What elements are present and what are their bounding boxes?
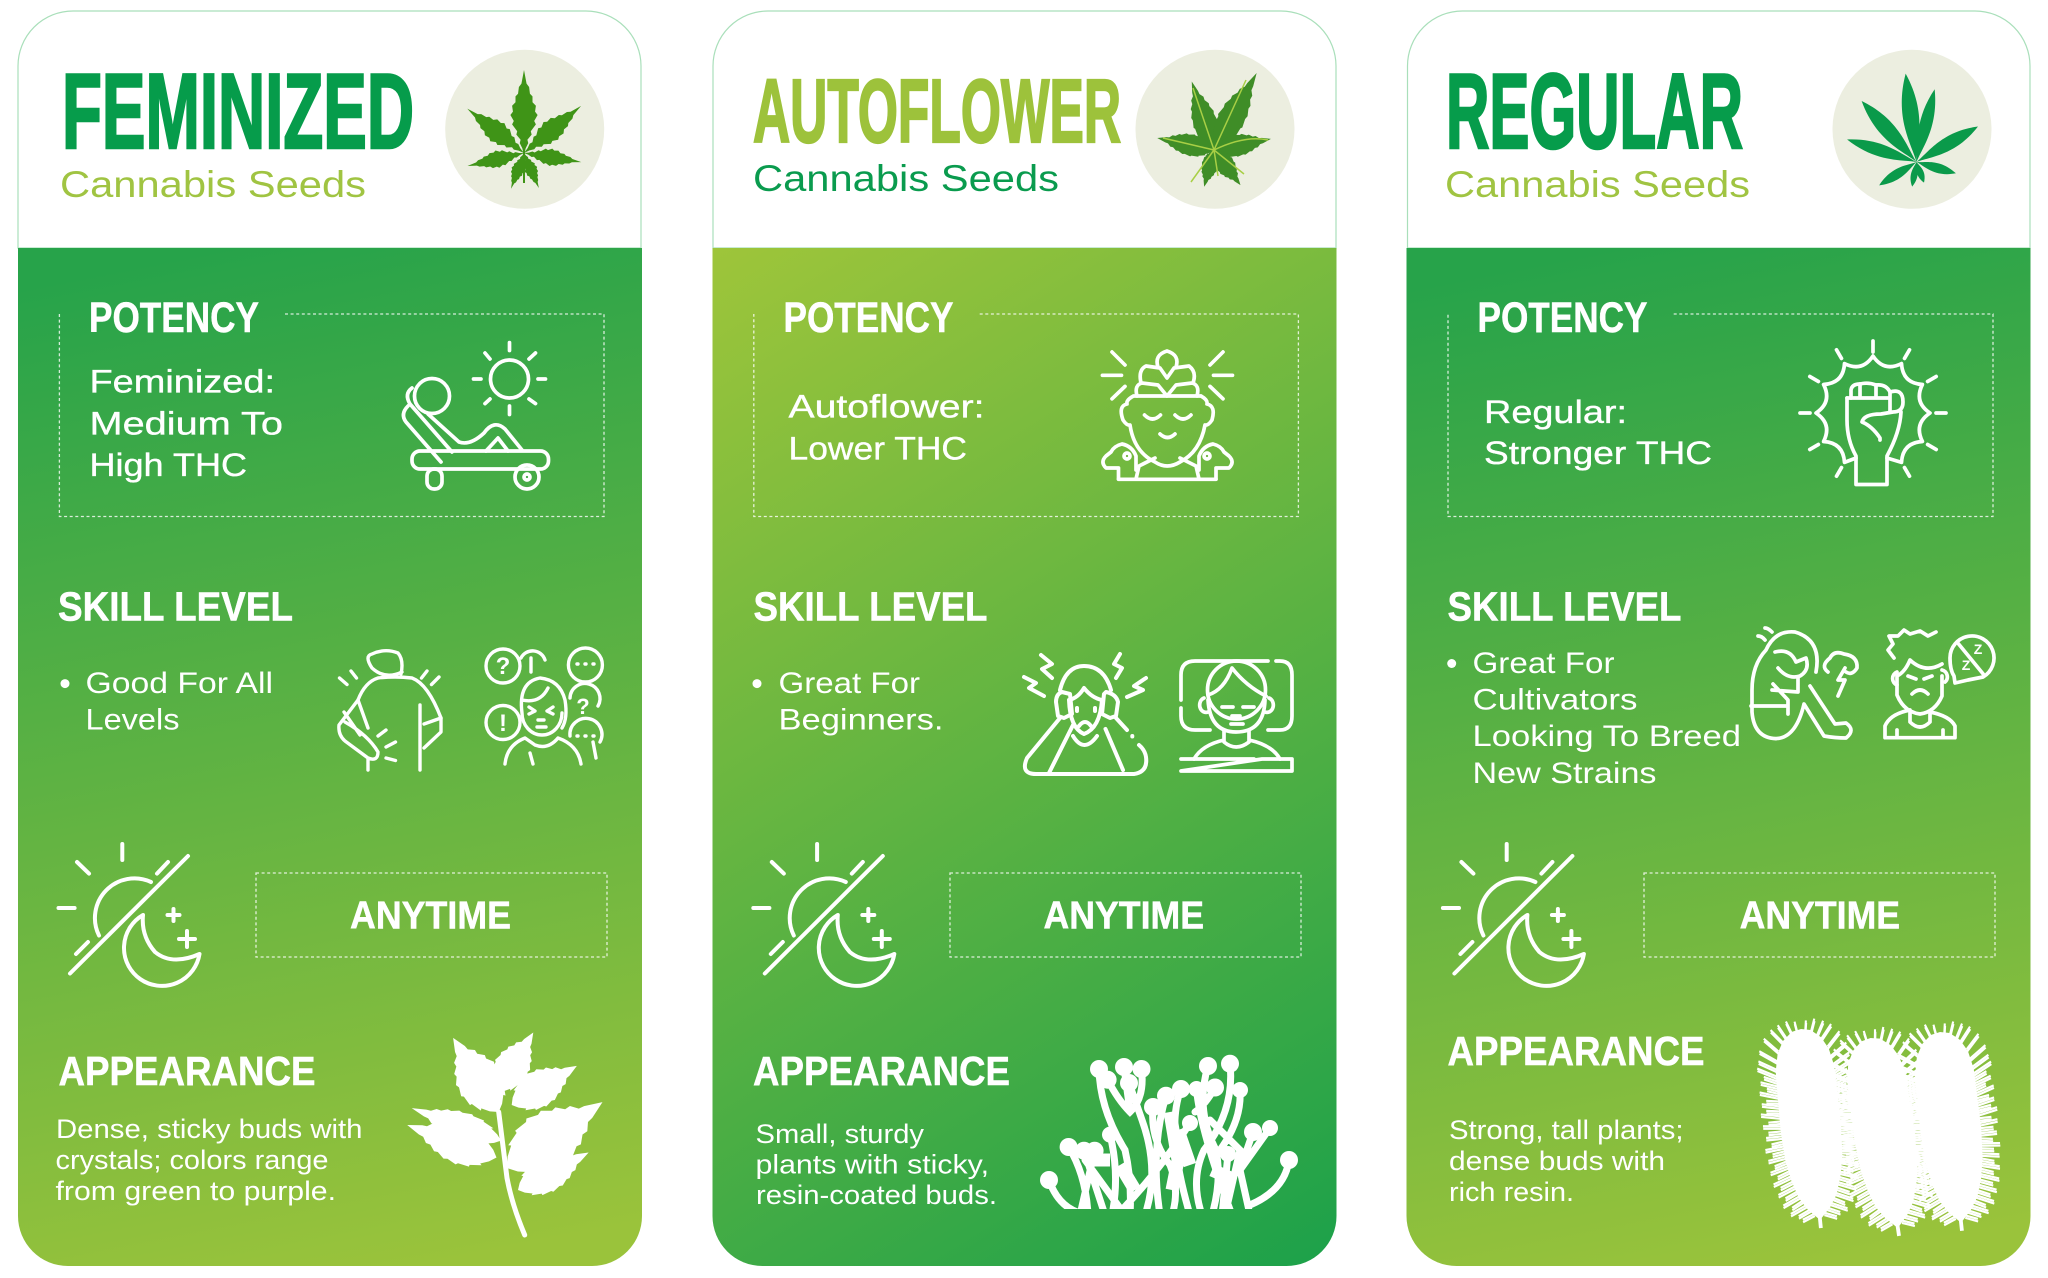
subtitle: Cannabis Seeds [60, 164, 366, 205]
potency box [754, 314, 1298, 516]
appearance text: rich resin. [1449, 1177, 1574, 1207]
icon: cannabis leaf [1136, 50, 1294, 209]
skill level text: New Strains [1472, 757, 1656, 790]
potency text [90, 364, 283, 483]
icon: day and night [1443, 844, 1584, 986]
gradient body [712, 248, 1336, 1266]
icon: day and night [58, 844, 200, 986]
potency text: Regular: [1484, 394, 1627, 430]
icon: cannabis leaf [1832, 50, 1992, 209]
potency text: Medium To [90, 406, 283, 442]
icon: anxious person sitting [1751, 628, 1857, 739]
skill level text: Cultivators [1472, 684, 1638, 716]
potency text [788, 388, 984, 466]
appearance text: Small, sturdy [756, 1119, 925, 1149]
illustration: bud stems [1040, 1055, 1298, 1215]
icon: raised fist burst [1800, 341, 1946, 484]
appearance text: Strong, tall plants; [1449, 1115, 1684, 1145]
panel: feminized [18, 11, 642, 1266]
appearance text [756, 1119, 997, 1210]
potency box [59, 314, 604, 516]
anytime box [256, 873, 607, 957]
heading: appearance: APPEARANCE [1448, 1028, 1704, 1074]
skill level text: Levels [86, 704, 180, 736]
title: regular: REGULAR [1446, 51, 1743, 171]
anytime box: ANYTIME [1044, 894, 1204, 938]
icon: sleepless person: Z [1962, 657, 1971, 673]
illustration: three feathery plants [1752, 1015, 2010, 1243]
heading: appearance: APPEARANCE [58, 1048, 316, 1094]
heading: potency: POTENCY [89, 294, 259, 342]
skill level text: Great For [1472, 647, 1614, 680]
skill level text [1447, 647, 1741, 790]
gradient body [18, 248, 642, 1266]
subtitle: Cannabis Seeds [753, 158, 1059, 199]
icon: person on lounger under sun [403, 343, 548, 489]
icon: relaxed mind with flower [1102, 351, 1232, 479]
icon: cannabis leaf [445, 50, 604, 209]
heading: skill level: SKILL LEVEL [58, 584, 293, 630]
heading: potency: POTENCY [1478, 294, 1648, 342]
appearance text: dense buds with [1449, 1146, 1665, 1176]
potency text: Feminized: [90, 364, 275, 400]
potency text: Stronger THC [1484, 435, 1712, 471]
appearance text [1449, 1115, 1684, 1207]
anytime box [950, 873, 1301, 957]
potency box [1448, 314, 1993, 516]
icon: woman surrounded by questions: ! [499, 710, 507, 737]
icon: woman surrounded by questions: ? [496, 653, 510, 680]
icon: man with back pain [339, 651, 441, 770]
icon: sleepless person: Z [1974, 641, 1983, 657]
icon: day and night [753, 844, 894, 986]
anytime box: ANYTIME [1740, 894, 1900, 938]
skill level text: Beginners. [778, 704, 944, 736]
potency text: Lower THC [788, 430, 967, 466]
skill level text [752, 667, 944, 736]
title: autoflower: AUTOFLOWER [753, 62, 1121, 162]
header card background [713, 11, 1336, 248]
heading: appearance: APPEARANCE [753, 1048, 1010, 1094]
header card background [18, 11, 641, 248]
potency text: Autoflower: [788, 388, 984, 424]
anytime box: ANYTIME [350, 894, 511, 938]
skill level text: Looking To Breed [1472, 720, 1741, 753]
icon: sleepless person [1885, 630, 1994, 738]
subtitle: Cannabis Seeds [1445, 164, 1750, 205]
header card background [1408, 11, 2030, 248]
icon: person with headache [1024, 654, 1146, 774]
gradient body [1406, 248, 2030, 1266]
panel: regular [1406, 11, 2030, 1266]
icon: person on pillow awake [1181, 661, 1292, 771]
appearance text [56, 1114, 362, 1206]
icon: woman surrounded by questions [486, 648, 602, 764]
appearance text: Dense, sticky buds with [56, 1114, 362, 1144]
appearance text: from green to purple. [56, 1176, 336, 1206]
skill level text: Good For All [86, 667, 273, 700]
appearance text: plants with sticky, [756, 1150, 989, 1180]
skill level text [60, 667, 273, 736]
anytime box [1644, 873, 1995, 957]
heading: skill level: SKILL LEVEL [1448, 584, 1682, 630]
skill level text: Great For [778, 667, 920, 700]
title: feminized: FEMINIZED [62, 51, 414, 171]
heading: potency: POTENCY [784, 294, 954, 342]
heading: skill level: SKILL LEVEL [754, 584, 988, 630]
icon: woman surrounded by questions: ? [576, 694, 590, 719]
appearance text: crystals; colors range [56, 1145, 328, 1175]
appearance text: resin-coated buds. [756, 1180, 997, 1210]
potency text: High THC [90, 447, 247, 483]
panel: autoflower [712, 11, 1336, 1266]
potency text [1484, 394, 1712, 471]
illustration: leafy branch [400, 1023, 619, 1235]
